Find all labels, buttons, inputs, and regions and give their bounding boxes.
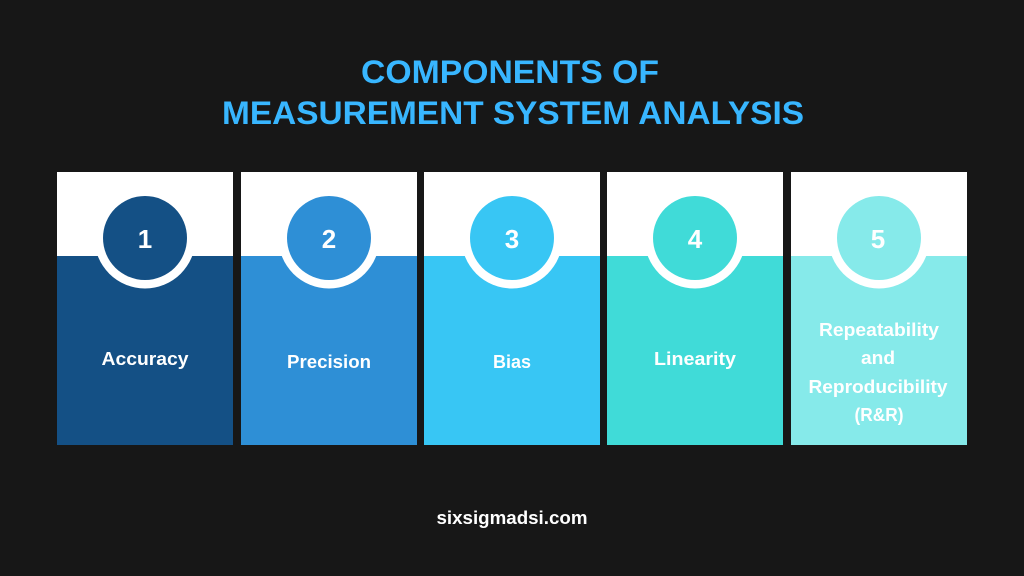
panel: 5 Repeatability and Reproducibility: and [861,347,895,368]
panel: 2 Precision: 2 [322,224,336,254]
panel: 3 Bias: 3 [505,224,519,254]
panel: 4 Linearity [607,172,783,445]
panel: 3 Bias: Bias [493,351,531,372]
panel: 5 Repeatability and Reproducibility: Reproducibility [808,376,948,397]
panel: 4 Linearity: Linearity [654,348,737,369]
panel: 5 Repeatability and Reproducibility: Repeatability [819,319,940,340]
panel: 5 Repeatability and Reproducibility: (R&R) [854,404,904,425]
panel: 5 Repeatability and Reproducibility: 5 [871,224,885,254]
panel: 1 Accuracy: 1 [138,224,152,254]
panel: 1 Accuracy: Accuracy [102,348,189,369]
panel: 5 Repeatability and Reproducibility [791,172,967,445]
panel: 2 Precision: Precision [287,351,371,372]
panel: 2 Precision [241,172,417,445]
panel: 1 Accuracy [57,172,233,445]
title [222,54,804,131]
panel: 4 Linearity: 4 [688,224,703,254]
title: MEASUREMENT SYSTEM ANALYSIS [222,95,804,131]
website footer: sixsigmadsi.com [436,508,588,528]
panel: 3 Bias [424,172,600,445]
title: COMPONENTS OF [361,54,659,90]
